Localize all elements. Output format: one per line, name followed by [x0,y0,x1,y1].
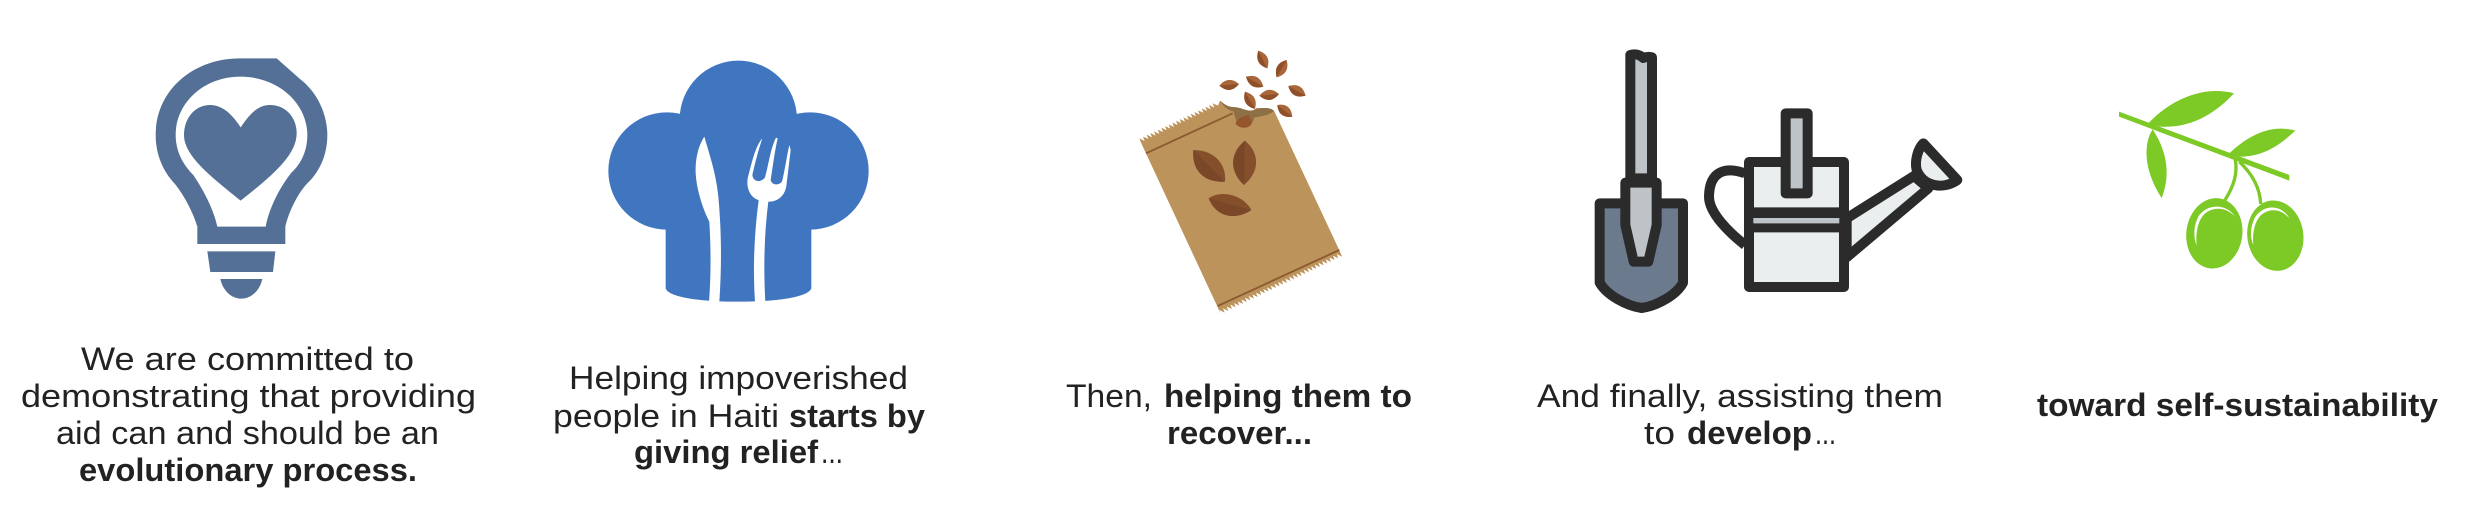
text: relief statement [553,360,925,470]
text: recovery statement: helping them to [1164,378,1412,414]
text: development statement [1537,378,1943,451]
text: commitment statement: aid can and should be an [56,415,439,451]
icon: chef hat with knife and fork [608,61,869,302]
panel: commitment [21,58,476,488]
text: development statement: develop [1687,415,1812,451]
icon: light bulb with heart [156,58,327,299]
icon: seed packet with spilling seeds [1139,51,1342,314]
panel: recovery [1066,51,1412,451]
icon: olive branch [2119,91,2308,275]
text: recovery statement [1066,378,1412,451]
text: recovery statement: Then, [1066,378,1152,414]
text: development statement: ... [1815,415,1836,451]
icon: shovel and watering can [1600,54,1957,308]
text: development statement: And finally, assisting them [1537,378,1943,414]
text: relief statement: people in Haiti [553,398,779,434]
text: recovery statement: recover... [1167,415,1312,451]
panel: self-sustainability [2037,91,2438,423]
text: relief statement: Helping impoverished [569,360,908,396]
text: commitment statement: demonstrating that providing [21,378,476,414]
text: commitment statement [21,341,476,488]
text: relief statement: giving relief [634,434,818,470]
text: relief statement: starts by [789,398,925,434]
text: commitment statement: evolutionary process. [79,452,417,488]
text: relief statement: ... [821,434,843,470]
text: development statement: to [1644,415,1675,451]
panel: relief [553,61,925,470]
text: self-sustainability statement: toward self-sustainability [2037,387,2438,423]
text: commitment statement: We are committed to [81,341,414,377]
panel: development [1537,54,1957,451]
